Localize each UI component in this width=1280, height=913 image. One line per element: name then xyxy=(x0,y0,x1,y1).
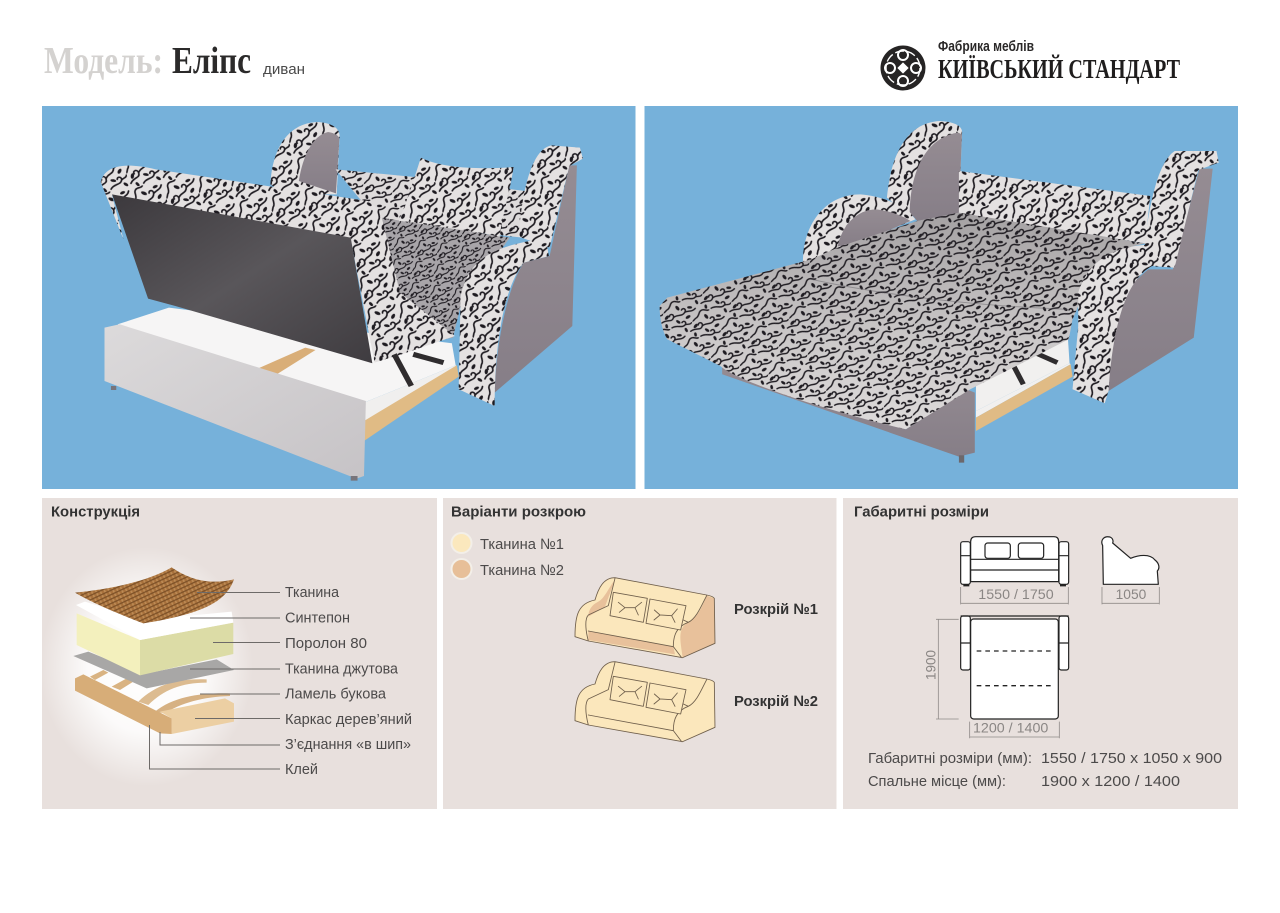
heading: Конструкція xyxy=(51,504,140,520)
panel: Габаритні розміри xyxy=(843,498,1238,809)
heading: Варіанти розкрою xyxy=(451,504,586,520)
labels: Поролон 80 xyxy=(285,635,367,652)
dimension values: 1550 / 1750 xyxy=(978,586,1054,602)
labels: Ламель букова xyxy=(285,686,387,702)
far right armrest and side panel xyxy=(495,145,583,393)
dimension drawings xyxy=(923,537,1159,738)
logo: Фабрика меблів Київський стандарт: Фабрика меблів xyxy=(938,38,1034,55)
heading: Габаритні розміри xyxy=(854,504,989,520)
panel: Конструкція xyxy=(40,498,437,809)
fabric sheet xyxy=(75,567,234,623)
near left armrest xyxy=(803,194,915,263)
layered construction illustration xyxy=(40,547,253,787)
side view xyxy=(1102,537,1159,584)
labels: З’єднання «в шип» xyxy=(285,736,411,753)
dimension values: 1050 xyxy=(1116,586,1147,602)
jute fabric xyxy=(73,652,234,688)
sofa back fabric xyxy=(336,169,525,238)
label: Розкрій №2: Розкрій №2 xyxy=(734,693,818,710)
under-bed storage xyxy=(976,339,1073,431)
labels: Клей xyxy=(285,761,318,778)
seat xyxy=(381,218,510,348)
dimensions text: Габаритні розміри (мм): xyxy=(868,750,1032,767)
drawing: sofa cut 1 xyxy=(575,578,715,658)
title: Модель Еліпс диван: Модель: xyxy=(44,40,163,82)
panel: Варіанти розкрою xyxy=(443,498,836,809)
foam xyxy=(77,613,233,675)
logo: Фабрика меблів Київський стандарт xyxy=(880,38,1180,90)
labels: Каркас дерев’яний xyxy=(285,711,412,728)
labels: Синтепон xyxy=(285,610,350,626)
mechanism xyxy=(394,354,444,386)
drawing: sofa cut 2 xyxy=(575,662,715,742)
top view xyxy=(961,616,1069,719)
far right armrest and side panel xyxy=(1109,151,1219,391)
near right armrest xyxy=(1073,244,1174,403)
dimensions text: 1900 x 1200 / 1400 xyxy=(1041,773,1180,790)
legend: fabric swatches: Тканина №1 xyxy=(480,536,564,553)
dimension values: 1900 xyxy=(923,650,939,680)
dimension values xyxy=(923,586,1147,736)
logo: Фабрика меблів Київський стандарт: КИЇВСЬКИЙ СТАНДАРТ xyxy=(938,54,1180,84)
title: Модель Еліпс диван: диван xyxy=(263,62,305,78)
dimensions text: 1550 / 1750 x 1050 x 900 xyxy=(1041,750,1222,767)
leader lines xyxy=(150,592,280,769)
drawer front panel xyxy=(105,324,366,481)
dimension lines xyxy=(936,587,1159,738)
bed mattress xyxy=(660,213,1145,429)
sofa back fabric xyxy=(959,171,1150,243)
pillow xyxy=(399,158,514,237)
title: Модель Еліпс диван xyxy=(44,40,305,82)
labels: Тканина xyxy=(285,584,340,601)
title: Модель Еліпс диван: Еліпс xyxy=(172,40,251,82)
labels: Тканина джутова xyxy=(285,660,399,678)
dimensions text: Спальне місце (мм): xyxy=(868,773,1006,790)
front view xyxy=(961,537,1069,586)
label: Розкрій №1: Розкрій №1 xyxy=(734,601,818,618)
icon: round ornament xyxy=(880,46,926,90)
legend: fabric swatches xyxy=(452,533,564,579)
raised seat frame xyxy=(101,166,455,363)
near right armrest xyxy=(459,239,549,406)
bed base xyxy=(722,366,975,463)
wooden frame xyxy=(75,670,234,734)
dimension values: 1200 / 1400 xyxy=(973,720,1049,736)
dimensions text xyxy=(868,750,1222,790)
legend: fabric swatches: Тканина №2 xyxy=(480,562,564,579)
photo: sofa with raised seat and open storage drawer xyxy=(42,106,636,489)
labels xyxy=(285,584,412,778)
synthetic padding xyxy=(76,602,233,640)
far left armrest xyxy=(887,121,962,221)
far left armrest xyxy=(270,122,340,194)
photo: sofa unfolded into a bed xyxy=(644,106,1238,489)
storage drawer interior xyxy=(118,308,459,441)
